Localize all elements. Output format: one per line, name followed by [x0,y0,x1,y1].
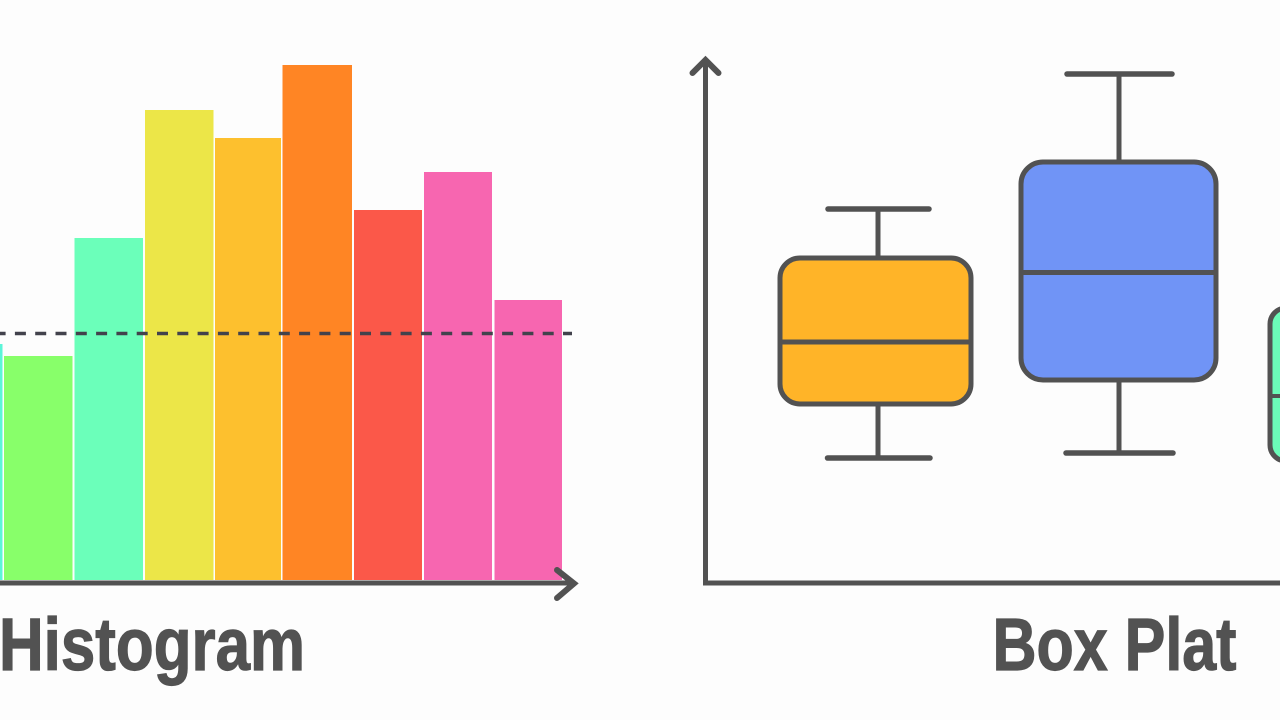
panel: histogram [0,65,574,686]
histogram bars [0,65,562,580]
x axis arrow [0,570,574,598]
panel: box plot [692,60,1280,686]
mean dashed line [0,332,572,335]
box plot label: Box Plat [992,603,1236,686]
histogram label: Histogram [0,603,305,686]
box: blue [1021,74,1216,453]
box: green, cropped at right edge [1270,308,1280,461]
axes [692,60,1280,583]
box: orange [780,209,971,458]
